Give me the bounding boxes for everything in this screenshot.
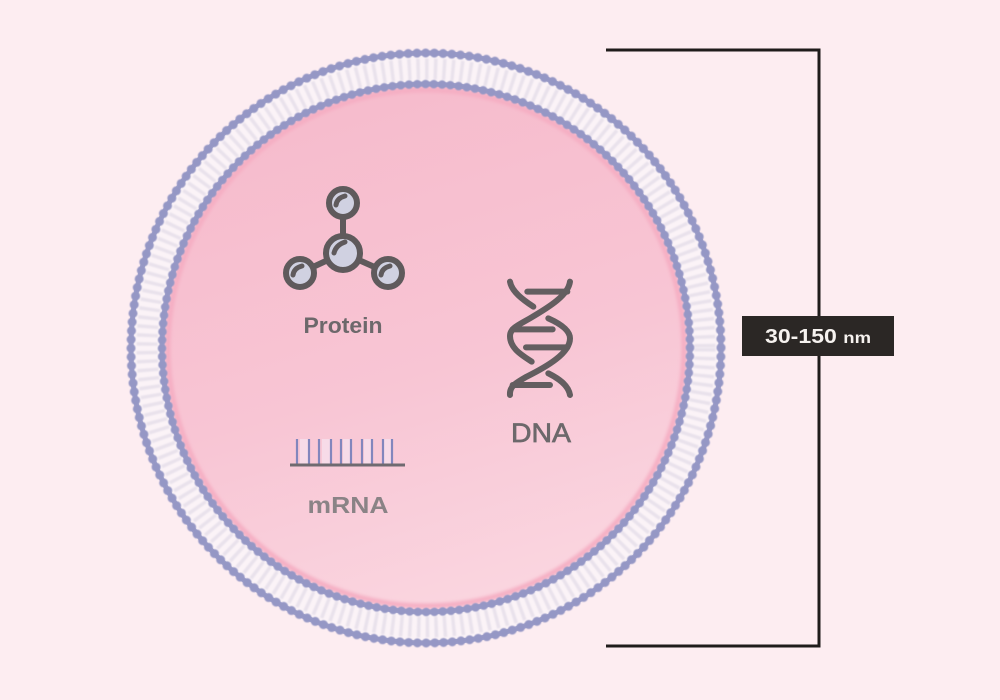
label: Protein: Protein — [304, 313, 382, 338]
callout: size label: 30-150 nm — [765, 326, 871, 348]
icon: protein molecule — [286, 189, 402, 287]
label: mRNA: mRNA — [308, 492, 388, 518]
inner lipid heads — [162, 84, 690, 612]
pale bases — [300, 439, 392, 464]
lipid tails — [147, 69, 705, 627]
label: DNA: DNA — [511, 418, 571, 448]
icon: DNA double helix — [510, 282, 570, 395]
bracket: vesicle diameter — [606, 50, 819, 646]
lumen rim — [168, 90, 684, 606]
outer lipid heads — [131, 53, 721, 643]
inner lipid band — [162, 84, 690, 612]
callout: size label — [742, 316, 894, 356]
outer lipid band — [131, 53, 721, 643]
membrane core — [147, 69, 705, 627]
lumen — [164, 86, 688, 610]
icon: mRNA strand — [290, 439, 405, 465]
vesicle: lipid bilayer membrane and lumen — [131, 53, 721, 643]
